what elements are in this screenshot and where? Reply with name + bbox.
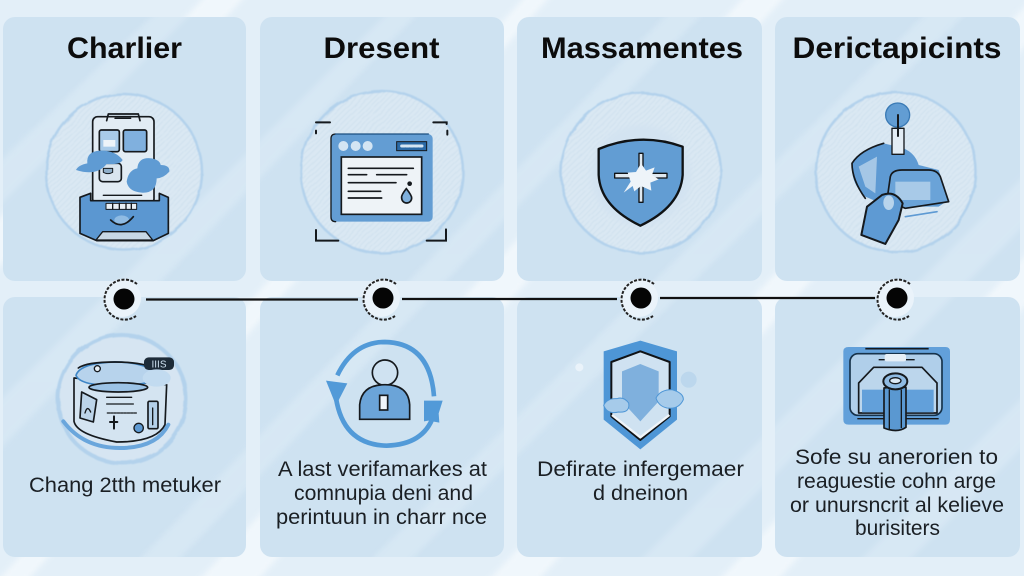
heading: Charlier: Charlier bbox=[67, 32, 182, 65]
text: caption: Chang 2tth metuker bbox=[29, 473, 221, 497]
panel: Charlier bbox=[46, 32, 202, 250]
icon: device in dock with clouds bbox=[76, 114, 169, 241]
text: description: Sofe su anerorien to bbox=[795, 445, 998, 469]
heading: Massamentes: Massamentes bbox=[541, 32, 743, 65]
panel: Dresent bbox=[301, 32, 463, 253]
timeline segment 1 bbox=[146, 298, 358, 301]
panel: Derictapicints bbox=[792, 32, 1002, 252]
text: description: reaguestie cohn arge bbox=[797, 469, 996, 493]
node 4 bbox=[876, 279, 914, 320]
text: description bbox=[276, 457, 487, 529]
text: description: comnupia deni and bbox=[294, 481, 473, 505]
panel: Safe suspension bbox=[790, 347, 1004, 540]
heading: Derictapicints: Derictapicints bbox=[792, 32, 1002, 65]
icon: round container with labels: IIIS bbox=[152, 359, 167, 370]
text: description: burisiters bbox=[855, 516, 940, 540]
text: description: Defirate infergemaer bbox=[537, 457, 744, 481]
icon: sketched circle backdrop bbox=[561, 93, 721, 253]
node 3 bbox=[620, 279, 658, 320]
node 2 bbox=[362, 279, 400, 320]
icon: round container with labels bbox=[63, 357, 174, 448]
icon: sketched circle backdrop bbox=[301, 91, 463, 253]
icon: sketched circle backdrop bbox=[816, 92, 976, 252]
panel: Massamentes bbox=[541, 32, 743, 253]
timeline segment 3 bbox=[660, 297, 875, 299]
icon: hexagonal shield with clouds bbox=[575, 341, 697, 449]
icon: browser window with document bbox=[316, 122, 447, 241]
panel: Defirate infergemaer bbox=[537, 341, 744, 505]
text: description bbox=[790, 445, 1004, 540]
icon: sketched circle backdrop bbox=[58, 335, 186, 463]
icon: shield with star bbox=[599, 140, 683, 226]
text: description: or unursncrit al kelieve bbox=[790, 493, 1004, 517]
text: description: perintuun in charr nce bbox=[276, 505, 487, 529]
icon: framed machine with column bbox=[843, 347, 950, 431]
timeline segment 2 bbox=[402, 298, 617, 300]
text: description: A last verifamarkes at bbox=[278, 457, 487, 481]
text: description bbox=[537, 457, 744, 505]
timeline with four nodes bbox=[103, 279, 914, 320]
icon: hand holding screen device bbox=[852, 103, 949, 244]
text: description: d dneinon bbox=[593, 481, 688, 505]
panel: A last verifamarkes bbox=[276, 342, 487, 529]
panel: Chang 2tth metuker bbox=[29, 335, 221, 497]
heading: Dresent: Dresent bbox=[324, 32, 440, 65]
icon: sketched circle backdrop bbox=[46, 94, 202, 250]
node 1 bbox=[103, 279, 141, 320]
icon: person in cycle arrows bbox=[326, 342, 443, 446]
